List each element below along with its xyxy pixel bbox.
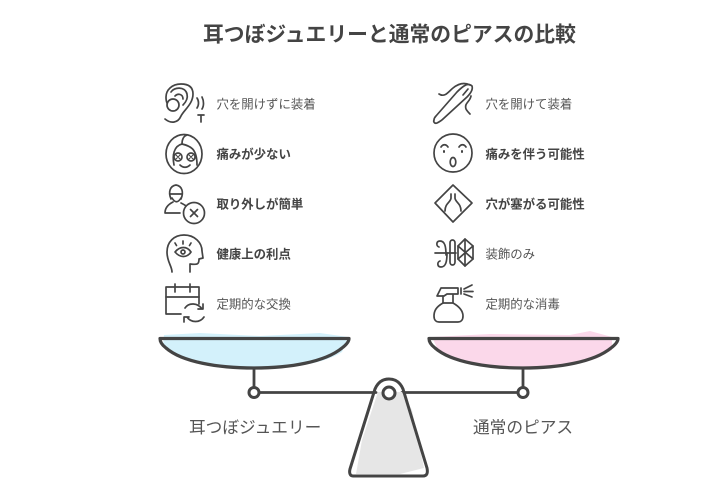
label: regular piercing: 通常のピアス bbox=[473, 418, 573, 437]
icon: needle and thread bbox=[434, 84, 472, 123]
text: may hurt: 痛みを伴う可能性 bbox=[486, 146, 585, 162]
label: ear jewelry: 耳つぼジュエリー bbox=[189, 418, 321, 437]
left pan bbox=[160, 333, 349, 368]
icon: narrowing road sign bbox=[435, 185, 472, 222]
icon: calendar with refresh bbox=[166, 284, 204, 322]
beam and pan supports bbox=[249, 368, 528, 398]
text: regular replacement: 定期的な交換 bbox=[216, 296, 291, 312]
text: health benefits: 健康上の利点 bbox=[216, 246, 291, 262]
icon: spray bottle bbox=[434, 285, 473, 322]
icon: surprised face bbox=[434, 134, 472, 172]
icon: relaxed face bbox=[166, 134, 202, 174]
right column: regular piercing features bbox=[434, 84, 585, 322]
icon: decorative bow bbox=[435, 239, 473, 267]
icon: person with remove mark bbox=[165, 185, 204, 224]
text: regular disinfection: 定期的な消毒 bbox=[486, 296, 560, 312]
left column: ear jewelry features bbox=[165, 84, 316, 322]
text: easy to remove: 取り外しが簡単 bbox=[216, 196, 303, 212]
fulcrum stand bbox=[350, 379, 427, 476]
text: no piercing: 穴を開けずに装着 bbox=[216, 96, 316, 112]
icon: head with eye bbox=[167, 235, 203, 272]
text: little pain: 痛みが少ない bbox=[216, 146, 291, 162]
title: 耳つぼジュエリーと通常のピアスの比較 bbox=[203, 24, 576, 46]
text: decoration only: 装飾のみ bbox=[486, 248, 535, 262]
text: hole may close: 穴が塞がる可能性 bbox=[486, 196, 585, 212]
icon: ear with sound bbox=[165, 84, 204, 122]
balance scale bbox=[160, 331, 618, 476]
right pan bbox=[429, 331, 618, 369]
text: pierce a hole: 穴を開けて装着 bbox=[486, 96, 572, 112]
